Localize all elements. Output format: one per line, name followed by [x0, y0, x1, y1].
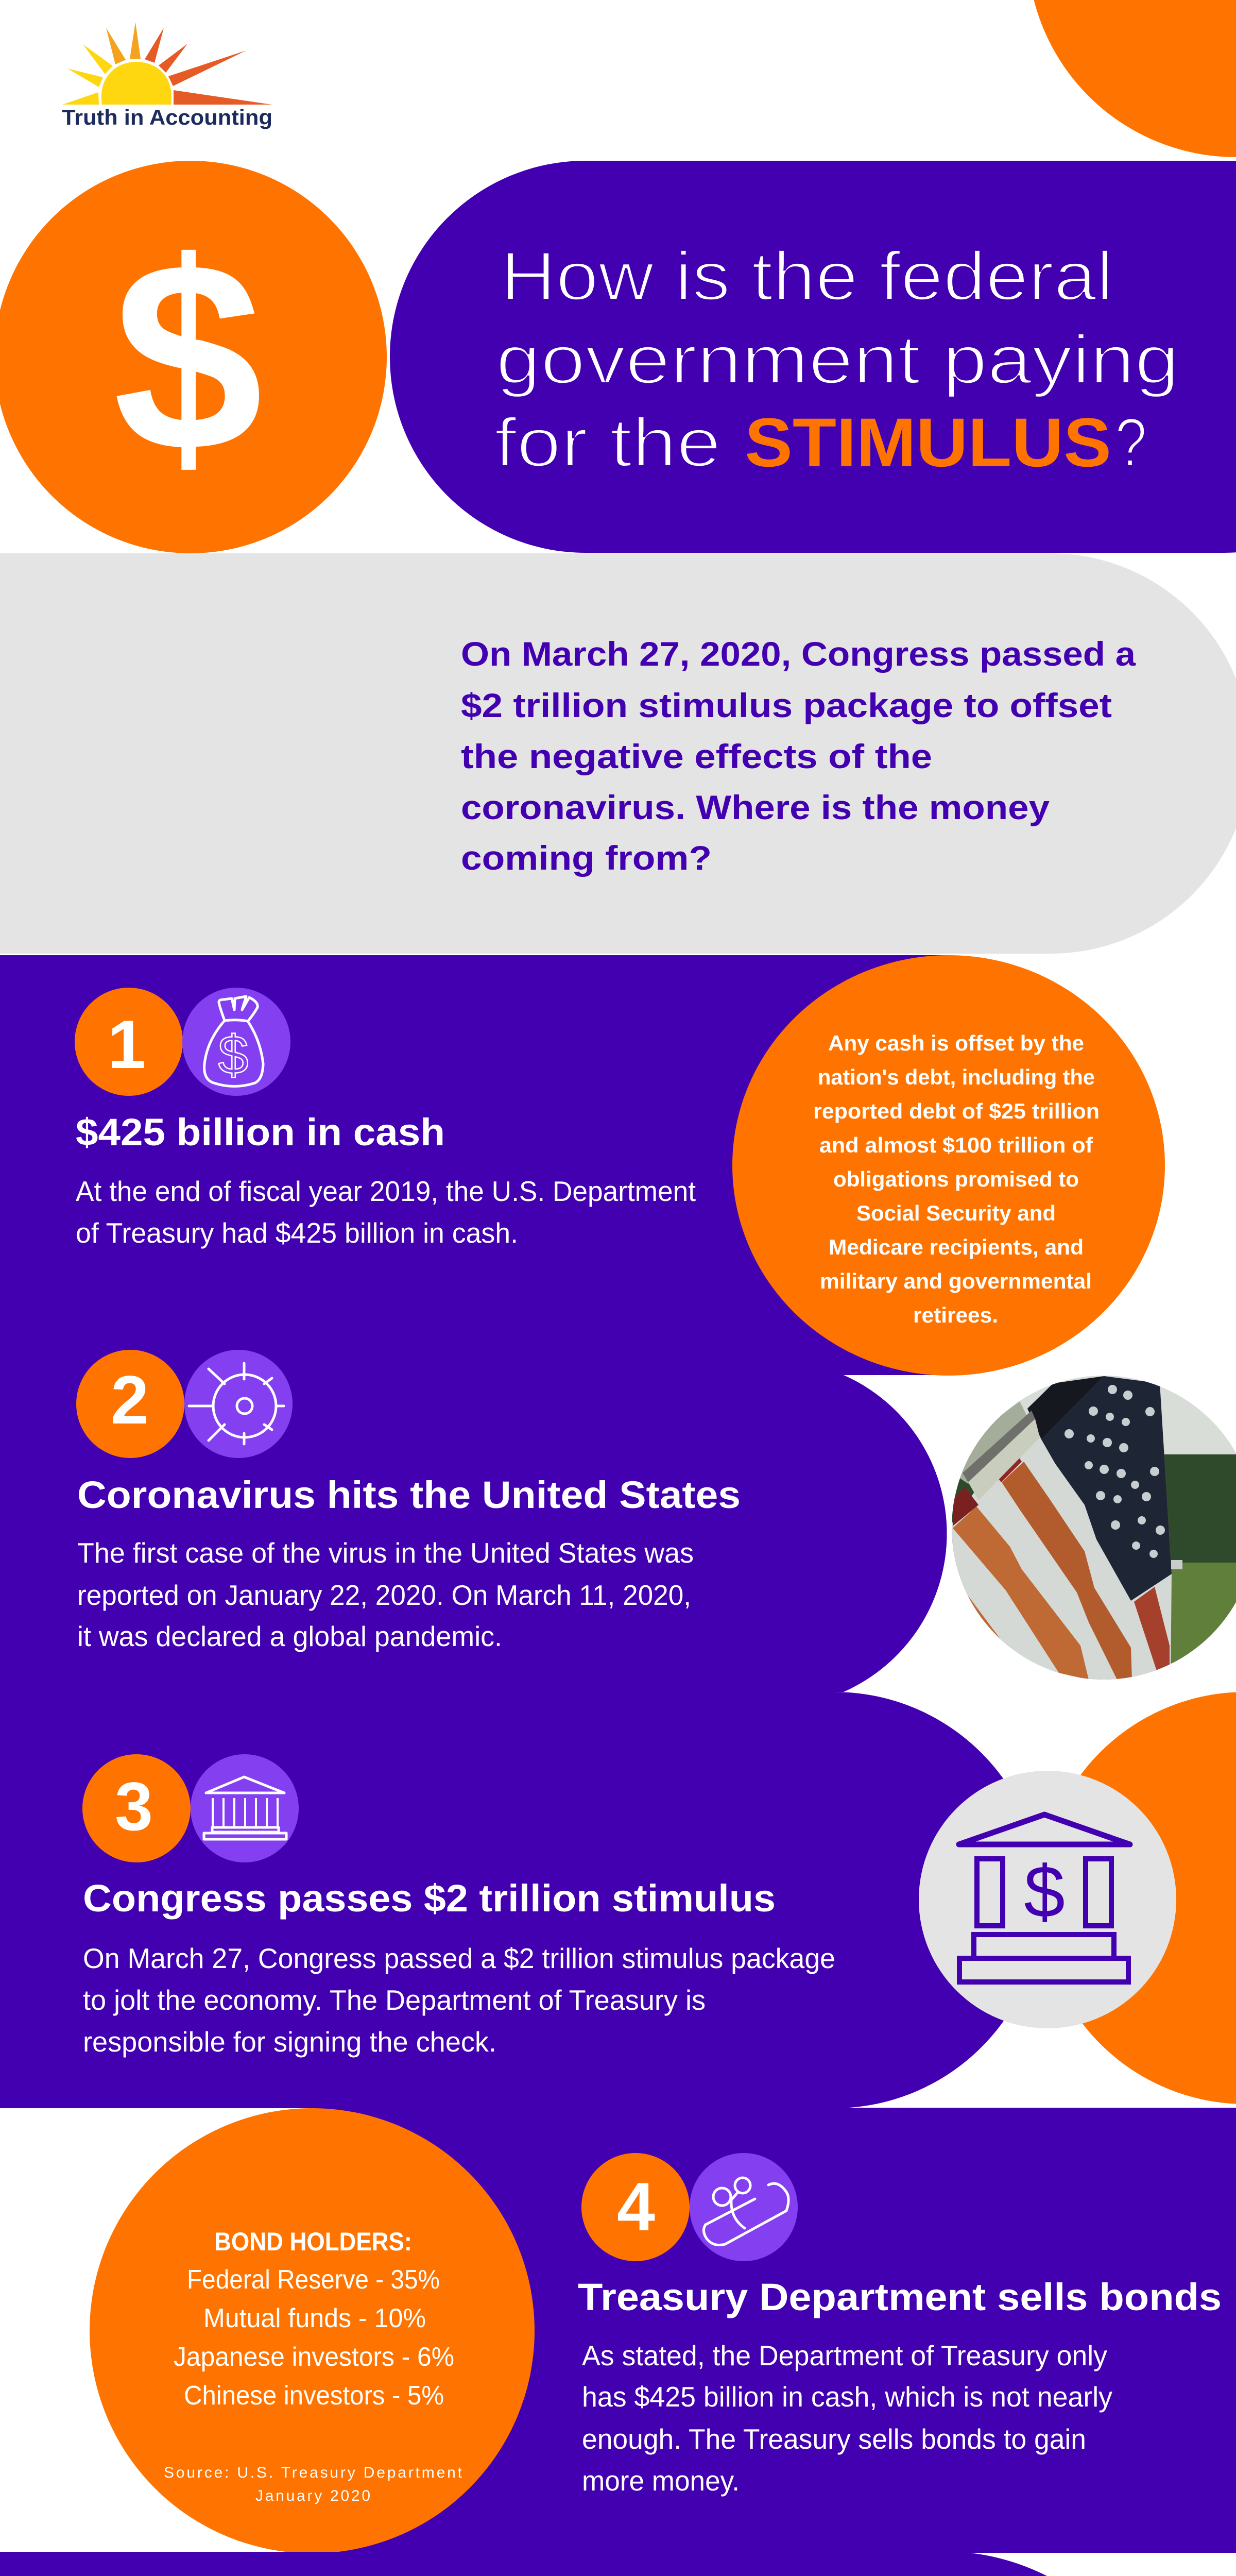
- heading: step 2: Coronavirus hits the United States: [77, 1473, 741, 1516]
- callout: debt offset: retirees.: [913, 1303, 998, 1327]
- text: step 1 body: At the end of fiscal year 2019, the U.S. Department: [76, 1175, 696, 1207]
- photo: American flag: [948, 1370, 1236, 1686]
- icon: bond scroll: [690, 2153, 798, 2261]
- panel: step 5 background: [0, 2552, 1172, 2576]
- panel: intro: the negative effects of the: [461, 737, 932, 775]
- panel: intro: coronavirus. Where is the money: [461, 788, 1050, 826]
- icon: money bag: $: [218, 1025, 248, 1086]
- heading: step 1: $425 billion in cash: [76, 1111, 445, 1154]
- panel: step 2 background: [0, 1375, 947, 1692]
- logo: Truth in Accounting: Truth in Accounting: [62, 105, 272, 129]
- callout: debt offset: Social Security and: [856, 1201, 1056, 1225]
- text: step 1 body: of Treasury had $425 billion in cash.: [76, 1217, 518, 1249]
- title panel: How is the federal: [501, 238, 1113, 315]
- panel: intro: coming from?: [461, 839, 712, 877]
- icon: large dollar coin: $: [113, 206, 263, 507]
- heading: step 3: Congress passes $2 trillion stimulus: [83, 1877, 776, 1920]
- panel: step 4 background: [312, 2108, 1236, 2553]
- callout: debt offset: military and governmental: [820, 1269, 1092, 1293]
- title panel: [390, 161, 1236, 553]
- icon: virus: [184, 1350, 293, 1458]
- badge: step 3 number: [82, 1754, 191, 1862]
- icon: large bank on grey circle: $: [1024, 1851, 1065, 1933]
- text: step 4 body: As stated, the Department of Treasury only: [582, 2340, 1107, 2371]
- callout: bond holders: Japanese investors - 6%: [174, 2342, 454, 2372]
- callout: bond holders: Chinese investors - 5%: [184, 2381, 444, 2411]
- decorative orange circle right of step 3: [1040, 1692, 1236, 2104]
- callout: debt offset: reported debt of $25 trillion: [813, 1099, 1100, 1123]
- heading: step 4: Treasury Department sells bonds: [578, 2276, 1222, 2318]
- badge: step 2 number: [76, 1350, 184, 1458]
- text: step 2 body: The first case of the virus in the United States was: [77, 1537, 694, 1569]
- text: step 3 body: responsible for signing the check.: [83, 2026, 496, 2058]
- badge: step 3 number: 3: [115, 1769, 153, 1845]
- callout: bond holders: BOND HOLDERS:: [214, 2227, 412, 2256]
- title panel: ?: [1115, 404, 1147, 481]
- text: step 2 body: [77, 1537, 694, 1652]
- icon: bank building: [191, 1754, 299, 1862]
- callout: debt offset: obligations promised to: [833, 1167, 1079, 1191]
- text: step 4 body: [582, 2340, 1112, 2497]
- callout: debt offset: Medicare recipients, and: [829, 1235, 1084, 1259]
- text: step 4 body: has $425 billion in cash, which is not nearly: [582, 2381, 1112, 2413]
- panel: step 1 background: [0, 955, 950, 1375]
- callout: debt offset: nation's debt, including the: [818, 1065, 1095, 1089]
- panel: intro: [0, 553, 1236, 954]
- callout: bond holders: January 2020: [255, 2487, 370, 2504]
- callout: bond holders: Federal Reserve - 35%: [187, 2265, 440, 2295]
- text: step 4 body: more money.: [582, 2465, 740, 2497]
- badge: step 1 number: [75, 988, 183, 1096]
- icon: money bag: [182, 988, 290, 1096]
- icon: large bank on grey circle: [919, 1771, 1176, 2028]
- panel: intro: On March 27, 2020, Congress passed a: [461, 635, 1136, 673]
- icon: large dollar coin: [0, 161, 387, 553]
- text: step 1 body: [76, 1175, 696, 1249]
- callout: debt offset: Any cash is offset by the: [828, 1031, 1084, 1055]
- logo: Truth in Accounting: [62, 22, 272, 129]
- text: step 3 body: [83, 1942, 835, 2058]
- text: step 2 body: reported on January 22, 2020. On March 11, 2020,: [77, 1579, 691, 1611]
- callout: bond holders: [90, 2108, 535, 2553]
- title panel: government paying: [496, 321, 1179, 398]
- text: step 3 body: On March 27, Congress passed a $2 trillion stimulus package: [83, 1942, 835, 1974]
- callout: debt offset: [732, 955, 1165, 1376]
- callout: debt offset: and almost $100 trillion of: [819, 1133, 1093, 1157]
- callout: bond holders: Source: U.S. Treasury Department: [164, 2464, 462, 2481]
- text: step 3 body: to jolt the economy. The Department of Treasury is: [83, 1984, 706, 2016]
- badge: step 4 number: 4: [617, 2169, 655, 2245]
- badge: step 2 number: 2: [111, 1362, 149, 1438]
- badge: step 1 number: 1: [108, 1007, 146, 1083]
- text: step 4 body: enough. The Treasury sells bonds to gain: [582, 2423, 1086, 2455]
- title panel: STIMULUS: [745, 404, 1111, 481]
- callout: bond holders: Mutual funds - 10%: [203, 2303, 426, 2333]
- text: step 2 body: it was declared a global pandemic.: [77, 1620, 502, 1652]
- panel: intro: $2 trillion stimulus package to offset: [461, 686, 1112, 724]
- title panel: for the: [494, 404, 721, 481]
- decorative orange corner circle: [1027, 0, 1236, 157]
- badge: step 4 number: [581, 2153, 690, 2261]
- panel: step 3 background: [0, 1692, 1042, 2108]
